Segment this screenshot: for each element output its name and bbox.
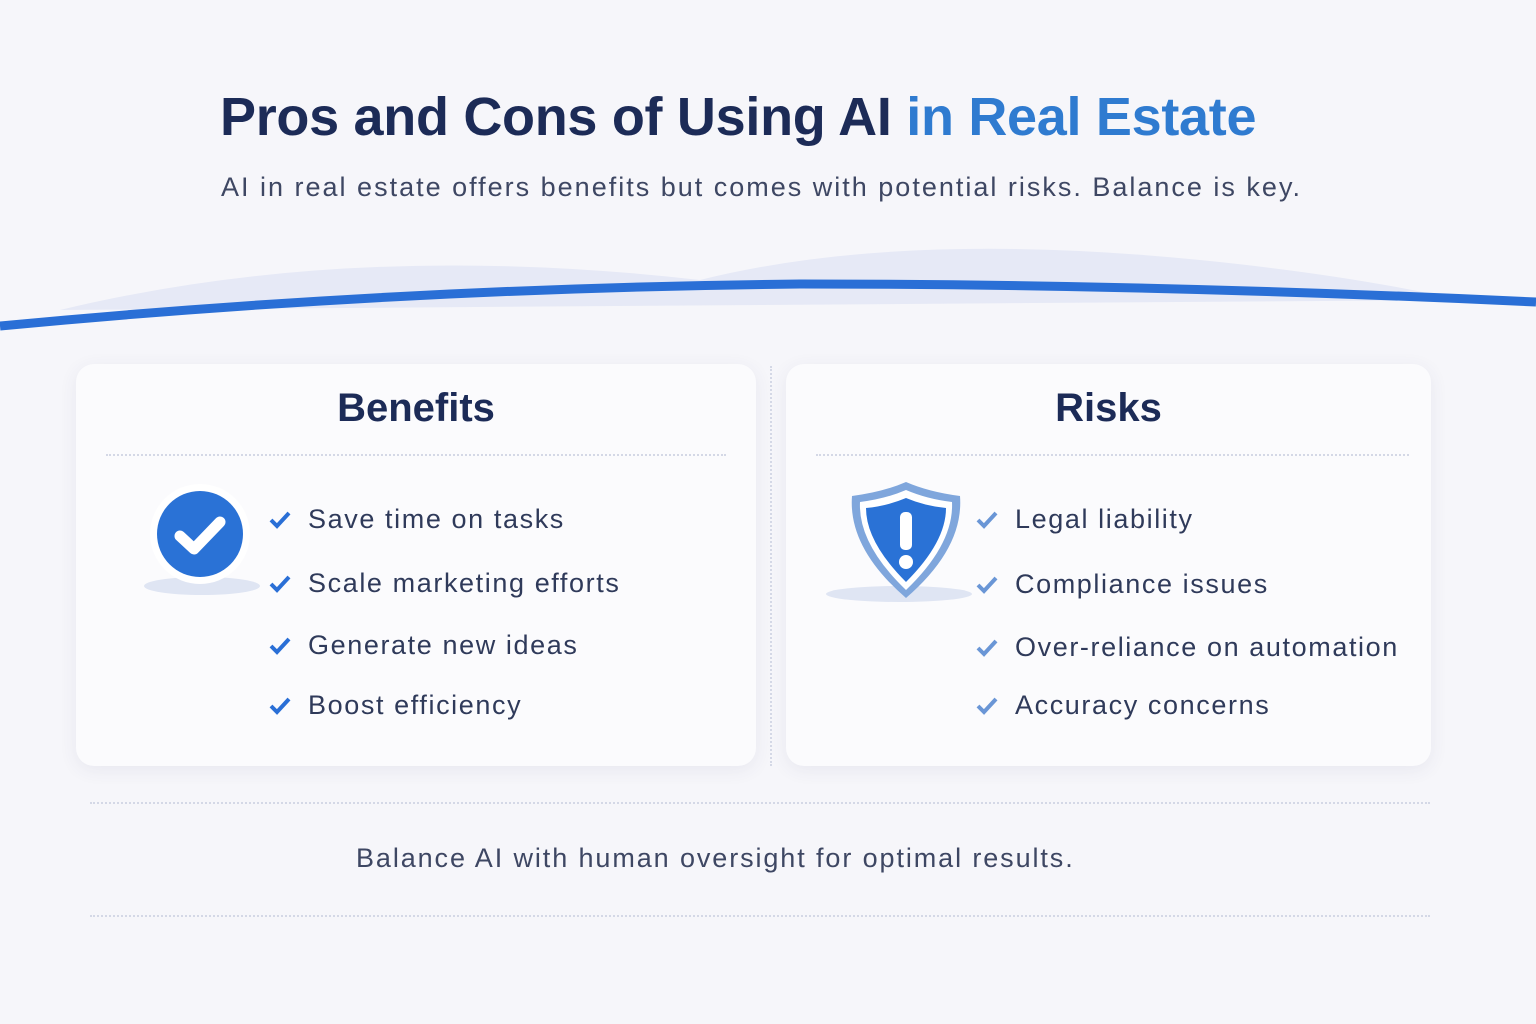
panel: risks (786, 364, 1431, 766)
benefit items (270, 504, 620, 720)
icon: check badge (144, 491, 260, 595)
benefit items: Scale marketing efforts (308, 568, 620, 598)
risk items: Over-reliance on automation (1015, 632, 1399, 662)
risk items: Legal liability (1015, 504, 1194, 534)
benefit items: Save time on tasks (308, 504, 565, 534)
icon: warning shield (826, 482, 972, 602)
risk items: Accuracy concerns (1015, 690, 1270, 720)
footer note: Balance AI with human oversight for optimal results. (356, 843, 1075, 873)
wave decoration (0, 249, 1536, 330)
title: Pros and Cons of Using AI in Real Estate (220, 87, 1256, 147)
subtitle: AI in real estate offers benefits but comes with potential risks. Balance is key. (221, 172, 1302, 202)
panel: benefits (76, 364, 756, 766)
risk items (976, 504, 1399, 720)
benefit items: Boost efficiency (308, 690, 522, 720)
heading: benefits: Benefits (337, 386, 495, 430)
heading: risks: Risks (1055, 386, 1162, 430)
benefit items: Generate new ideas (308, 630, 578, 660)
risk items: Compliance issues (1015, 569, 1269, 599)
